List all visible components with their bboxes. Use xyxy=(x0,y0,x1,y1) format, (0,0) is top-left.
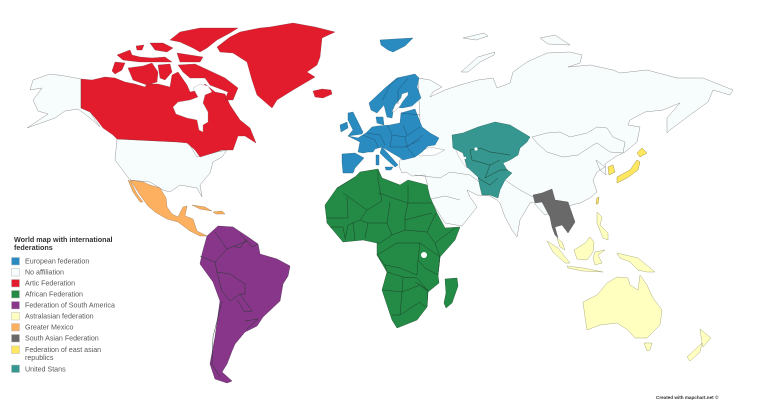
legend item: Federation of east asian republics: republics xyxy=(25,354,54,362)
legend item: Federation of South America: Federation of South America xyxy=(25,302,115,310)
credit line: Created with mapchart.net © xyxy=(656,394,719,400)
legend item: Federation of east asian republics xyxy=(12,346,101,362)
legend item: African Federation: African Federation xyxy=(25,290,83,298)
legend item: European federation: European federation xyxy=(25,258,89,266)
legend item: No affiliation: No affiliation xyxy=(25,268,64,276)
legend item: Federation of east asian republics: Federation of east asian xyxy=(25,346,101,354)
region: no affiliation (Alaska, USA, Eurasia) xyxy=(27,33,733,237)
legend item: South Asian Federation: South Asian Federation xyxy=(25,334,99,342)
region: European federation xyxy=(340,38,439,173)
region: Federation of east Asian republics xyxy=(596,148,647,204)
region: Federation of South America xyxy=(200,226,290,383)
legend item: Artic Federation: Artic Federation xyxy=(25,280,75,288)
legend item: Astralasian federation: Astralasian federation xyxy=(25,312,94,320)
region: Greater Mexico and Central America xyxy=(128,180,225,236)
region: Arctic Federation (Canada, Greenland, Iceland) xyxy=(81,23,335,157)
region: Astralasian federation xyxy=(547,212,711,361)
legend item: United Stans: United Stans xyxy=(25,366,66,374)
region: African Federation xyxy=(325,169,460,328)
legend title: federations xyxy=(14,243,53,252)
region: South Asian Federation xyxy=(533,189,575,238)
region: United Stans xyxy=(452,122,530,198)
legend xyxy=(12,235,115,374)
legend title: World map with international xyxy=(14,235,113,244)
legend item: Greater Mexico: Greater Mexico xyxy=(25,324,74,332)
